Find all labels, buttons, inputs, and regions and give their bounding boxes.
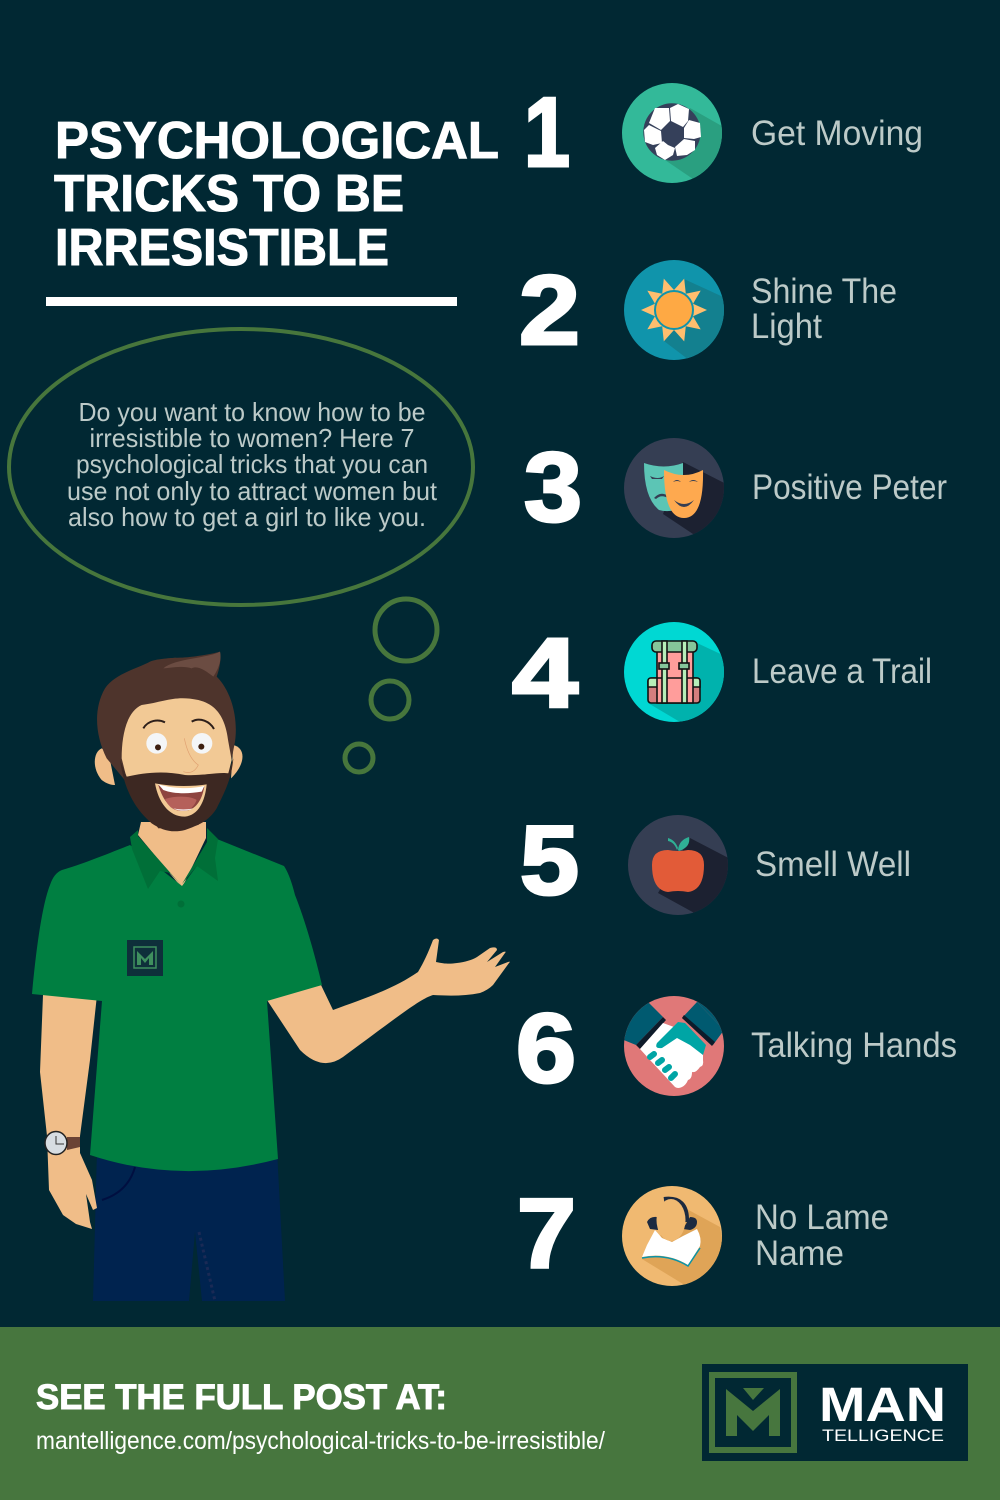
label: Positive Peter: Positive Peter	[752, 468, 947, 507]
speech bubble	[9, 329, 473, 605]
footer heading: SEE THE FULL POST AT:	[36, 1378, 447, 1417]
logo: Mantelligence	[702, 1364, 968, 1461]
speech bubble: psychological tricks that you can	[76, 449, 428, 479]
head	[95, 652, 242, 831]
icon: theatre masks	[624, 438, 724, 538]
icon: soccer ball	[622, 83, 722, 183]
speech bubble: irresistible to women? Here 7	[90, 423, 414, 453]
title underline	[46, 297, 457, 306]
title: TRICKS TO BE	[54, 165, 404, 223]
character: bearded man	[32, 652, 510, 1301]
speech bubble: use not only to attract women but	[67, 476, 438, 506]
logo: Mantelligence: MAN	[819, 1379, 946, 1432]
label: Get Moving: Get Moving	[751, 114, 923, 153]
thought bubbles	[345, 599, 437, 772]
label: Leave a Trail: Leave a Trail	[752, 652, 932, 691]
speech bubble: Do you want to know how to be	[78, 397, 426, 427]
label: Talking Hands: Talking Hands	[751, 1026, 957, 1065]
number 7: 7	[517, 1178, 576, 1288]
icon: backpack	[624, 622, 724, 722]
icon: apple	[628, 815, 728, 915]
number 5: 5	[520, 805, 579, 915]
number 1: 1	[524, 77, 570, 187]
label: Smell Well: Smell Well	[755, 845, 911, 884]
number 4: 4	[512, 618, 578, 728]
number 2: 2	[519, 255, 580, 365]
label: Shine The Light: Shine The	[751, 272, 897, 311]
icon: handshake	[624, 996, 724, 1096]
title	[54, 112, 499, 277]
footer url: mantelligence.com/psychological-tricks-to-be-irresistible/	[36, 1427, 605, 1455]
label: Shine The Light: Light	[751, 307, 822, 346]
number 3: 3	[524, 432, 582, 542]
label: Shine The Light	[751, 272, 897, 346]
title: IRRESISTIBLE	[55, 219, 389, 277]
speech bubble: also how to get a girl to like you.	[68, 502, 426, 532]
number 6: 6	[516, 993, 576, 1103]
icon: person with headset	[622, 1186, 722, 1286]
title: PSYCHOLOGICAL	[55, 112, 499, 170]
logo: Mantelligence: TELLIGENCE	[822, 1426, 944, 1445]
footer band	[0, 1327, 1000, 1500]
label: No Lame Name: No Lame	[755, 1198, 889, 1237]
icon: sun	[624, 260, 724, 360]
label: No Lame Name: Name	[755, 1234, 844, 1273]
label: No Lame Name	[755, 1198, 889, 1273]
